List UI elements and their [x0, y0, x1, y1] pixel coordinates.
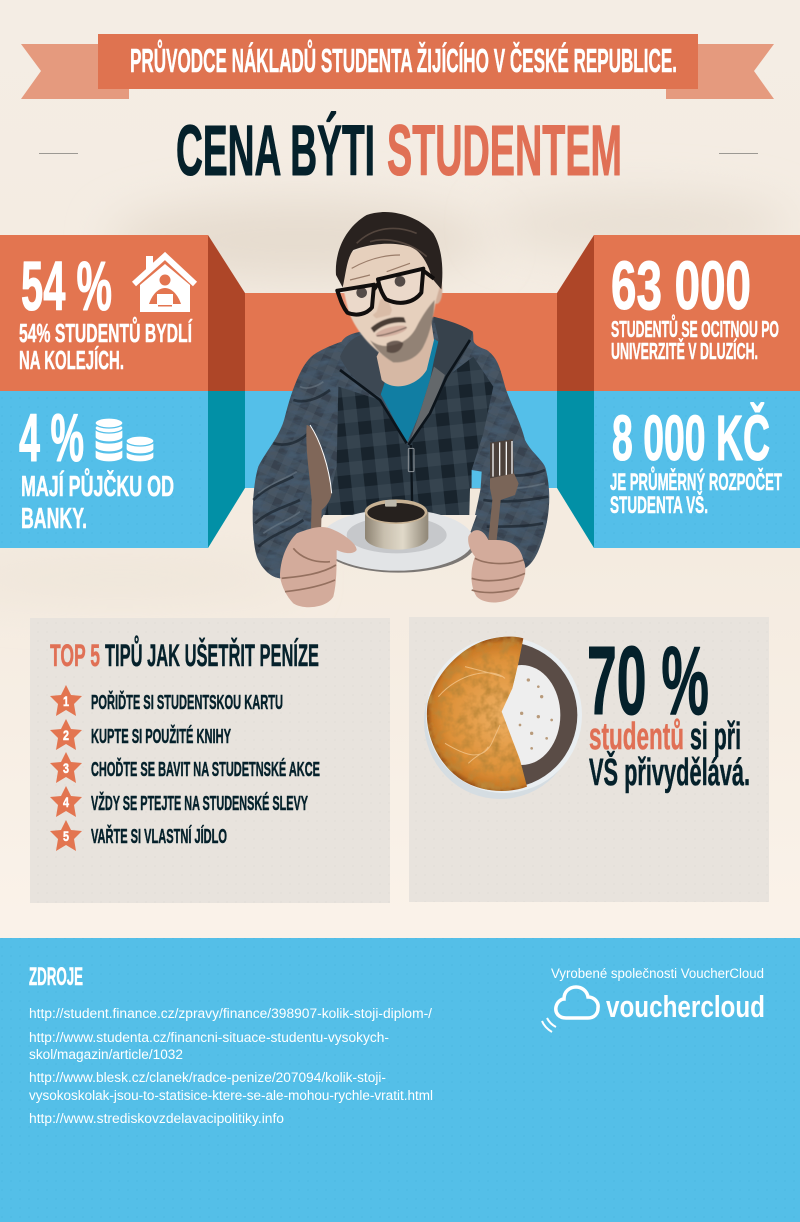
hood collar	[340, 317, 473, 445]
tip 5: VAŘTE SI VLASTNÍ JÍDLO	[91, 824, 227, 848]
pie caption	[589, 716, 750, 794]
tip 5: 5	[63, 828, 69, 844]
panel: 54 % dorms: 54 %	[21, 247, 112, 325]
hoodie	[253, 317, 549, 578]
sources list: http://student.finance.cz/zpravy/finance/398907-kolik-stoji-diplom-/	[29, 1006, 432, 1021]
pie chart: 70 % crust	[424, 637, 582, 799]
panel: 63 000 in debt	[594, 235, 800, 391]
tips heading: TOP 5	[50, 637, 100, 673]
panel: 4 % bank loan: BANKY.	[21, 503, 87, 535]
tip 5	[50, 820, 227, 851]
sources heading: ZDROJE	[29, 963, 83, 991]
icon: coin stacks	[95, 418, 154, 462]
panel: 70 % earn extra	[409, 617, 769, 902]
icon: house with student	[134, 256, 195, 312]
illustration: student with knife, fork and empty can	[253, 212, 549, 607]
fork	[488, 439, 519, 540]
sources list: skol/magazin/article/1032	[29, 1047, 183, 1062]
tip 2: KUPTE SI POUŽITÉ KNIHY	[91, 724, 231, 748]
tip 2: 2	[63, 727, 69, 743]
tin can	[365, 499, 428, 550]
sources list: vysokoskolak-jsou-to-statisice-ktere-se-ale-mohou-rychle-vratit.html	[29, 1088, 433, 1103]
panel: 54 % dorms: NA KOLEJÍCH.	[19, 345, 124, 375]
title: CENA BÝTI	[176, 112, 375, 191]
sources list: http://www.blesk.cz/clanek/radce-penize/207094/kolik-stoji-	[29, 1070, 386, 1085]
hair streaks	[357, 228, 427, 257]
pie caption: si při	[690, 716, 741, 758]
sources list: http://www.studenta.cz/financni-situace-studentu-vysokych-	[29, 1030, 389, 1045]
forehead lines and eyebrows	[350, 255, 410, 280]
tip 4: 4	[63, 794, 69, 810]
tip 4	[50, 786, 308, 817]
glasses	[337, 269, 434, 315]
tips heading	[50, 635, 319, 673]
tip 3: 3	[63, 760, 69, 776]
right hand	[468, 530, 525, 602]
pie caption: studentů	[589, 716, 684, 758]
tip 1	[50, 685, 283, 716]
footer	[0, 938, 800, 1222]
panel: 4 % bank loan	[0, 391, 208, 548]
tips heading: TIPŮ JAK UŠETŘIT PENÍZE	[105, 635, 319, 673]
tip 3: CHOĎTE SE BAVIT NA STUDETNSKÉ AKCE	[91, 757, 320, 781]
panel: top 5 tips	[30, 618, 390, 903]
panel: 8 000 Kč budget	[594, 391, 800, 548]
tip 1: 1	[63, 693, 69, 709]
banner ribbon	[21, 34, 774, 99]
panel: 8 000 Kč budget: STUDENTA VŠ.	[610, 491, 708, 519]
hair	[336, 212, 442, 289]
panel: 54 % dorms: 54% STUDENTŮ BYDLÍ	[19, 316, 192, 348]
panel: 54 % dorms	[0, 235, 208, 391]
central 3D band	[208, 235, 594, 548]
panel: 4 % bank loan: MAJÍ PŮJČKU OD	[21, 467, 174, 503]
tip 4: VŽDY SE PTEJTE NA STUDENSKÉ SLEVY	[91, 791, 308, 815]
t-shirt	[379, 337, 439, 443]
sources list: http://www.strediskovzdelavacipolitiky.info	[29, 1111, 284, 1126]
knife	[306, 425, 332, 545]
panel: 4 % bank loan: 4 %	[19, 400, 84, 476]
tip 3	[50, 752, 320, 783]
zipper	[408, 445, 414, 515]
title	[39, 112, 758, 191]
logo: vouchercloud	[542, 987, 765, 1032]
tip 1: POŘIĎTE SI STUDENTSKOU KARTU	[91, 690, 283, 714]
left hand	[280, 527, 357, 607]
tip 2	[50, 719, 231, 750]
head	[342, 242, 442, 362]
sources list	[29, 1006, 433, 1126]
credit line: Vyrobené společnosti VoucherCloud	[551, 966, 764, 981]
plate	[320, 509, 476, 573]
neck	[377, 313, 434, 386]
